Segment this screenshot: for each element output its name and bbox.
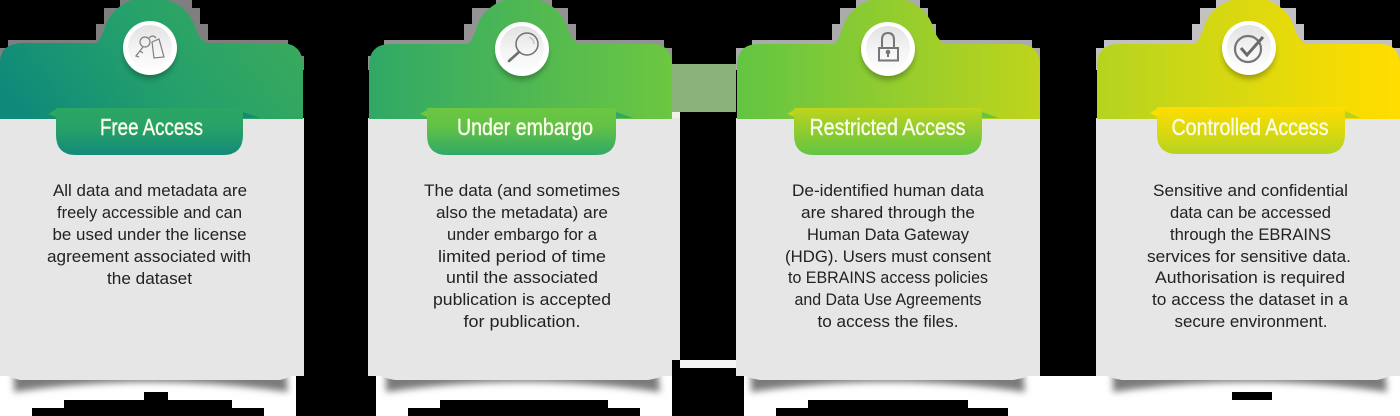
tab: Controlled Access — [1150, 107, 1361, 154]
panel: Free Access — [0, 0, 304, 392]
body text: Under embargo: The data (and sometimes — [424, 182, 620, 200]
body text: Restricted Access: and Data Use Agreements — [794, 291, 982, 309]
tab: Free Access: Free Access — [100, 114, 203, 140]
tab: Restricted Access — [787, 108, 999, 155]
body text: Controlled Access: services for sensitive data. — [1147, 248, 1351, 266]
panel: Under embargo — [368, 0, 680, 392]
panel: Restricted Access — [736, 0, 1040, 392]
body text: Under embargo: under embargo for a — [447, 226, 598, 244]
body text: Restricted Access: are shared through the — [801, 204, 975, 222]
body text: Controlled Access: Sensitive and confidential — [1153, 182, 1348, 200]
icon: keys — [123, 21, 177, 79]
body text: Controlled Access: to access the dataset in a — [1152, 291, 1349, 309]
tab: Restricted Access: Restricted Access — [810, 114, 966, 140]
icon: padlock — [861, 22, 915, 80]
icon: magnifier — [495, 22, 549, 80]
icon: check mark — [1222, 21, 1276, 79]
body text: Controlled Access: data can be accessed — [1170, 204, 1331, 222]
body text: Controlled Access: through the EBRAINS — [1170, 226, 1331, 244]
body text: Under embargo: limited period of time — [438, 248, 606, 266]
tab: Under embargo: Under embargo — [457, 114, 593, 140]
body text: Under embargo — [424, 182, 620, 331]
body text: Free Access: freely accessible and can — [57, 204, 242, 222]
body text: Controlled Access — [1147, 182, 1351, 331]
tab: Under embargo — [420, 108, 633, 155]
body text: Under embargo: publication is accepted — [433, 291, 611, 309]
body text: Restricted Access: (HDG). Users must consent — [785, 248, 991, 266]
body text: Restricted Access — [785, 182, 991, 331]
body text: Free Access: agreement associated with — [47, 248, 251, 266]
panel: Controlled Access — [1096, 0, 1400, 392]
body text: Free Access: the dataset — [107, 270, 192, 288]
body text: Free Access: be used under the license — [52, 226, 246, 244]
body text: Under embargo: also the metadata) are — [436, 204, 608, 222]
body text: Restricted Access: to access the files. — [818, 313, 958, 331]
body text: Restricted Access: De-identified human data — [792, 182, 985, 200]
body text: Under embargo: until the associated — [446, 269, 598, 287]
body text: Free Access: All data and metadata are — [53, 182, 247, 200]
body text: Restricted Access: to EBRAINS access policies — [788, 269, 988, 287]
body text: Controlled Access: Authorisation is required — [1155, 269, 1345, 287]
body text: Restricted Access: Human Data Gateway — [807, 226, 970, 244]
connector band between cards — [672, 64, 736, 368]
body text: Free Access — [47, 182, 251, 288]
body text: Under embargo: for publication. — [464, 313, 580, 331]
body text: Controlled Access: secure environment. — [1174, 313, 1328, 331]
tab: Free Access — [48, 108, 260, 155]
tab: Controlled Access: Controlled Access — [1172, 114, 1328, 140]
